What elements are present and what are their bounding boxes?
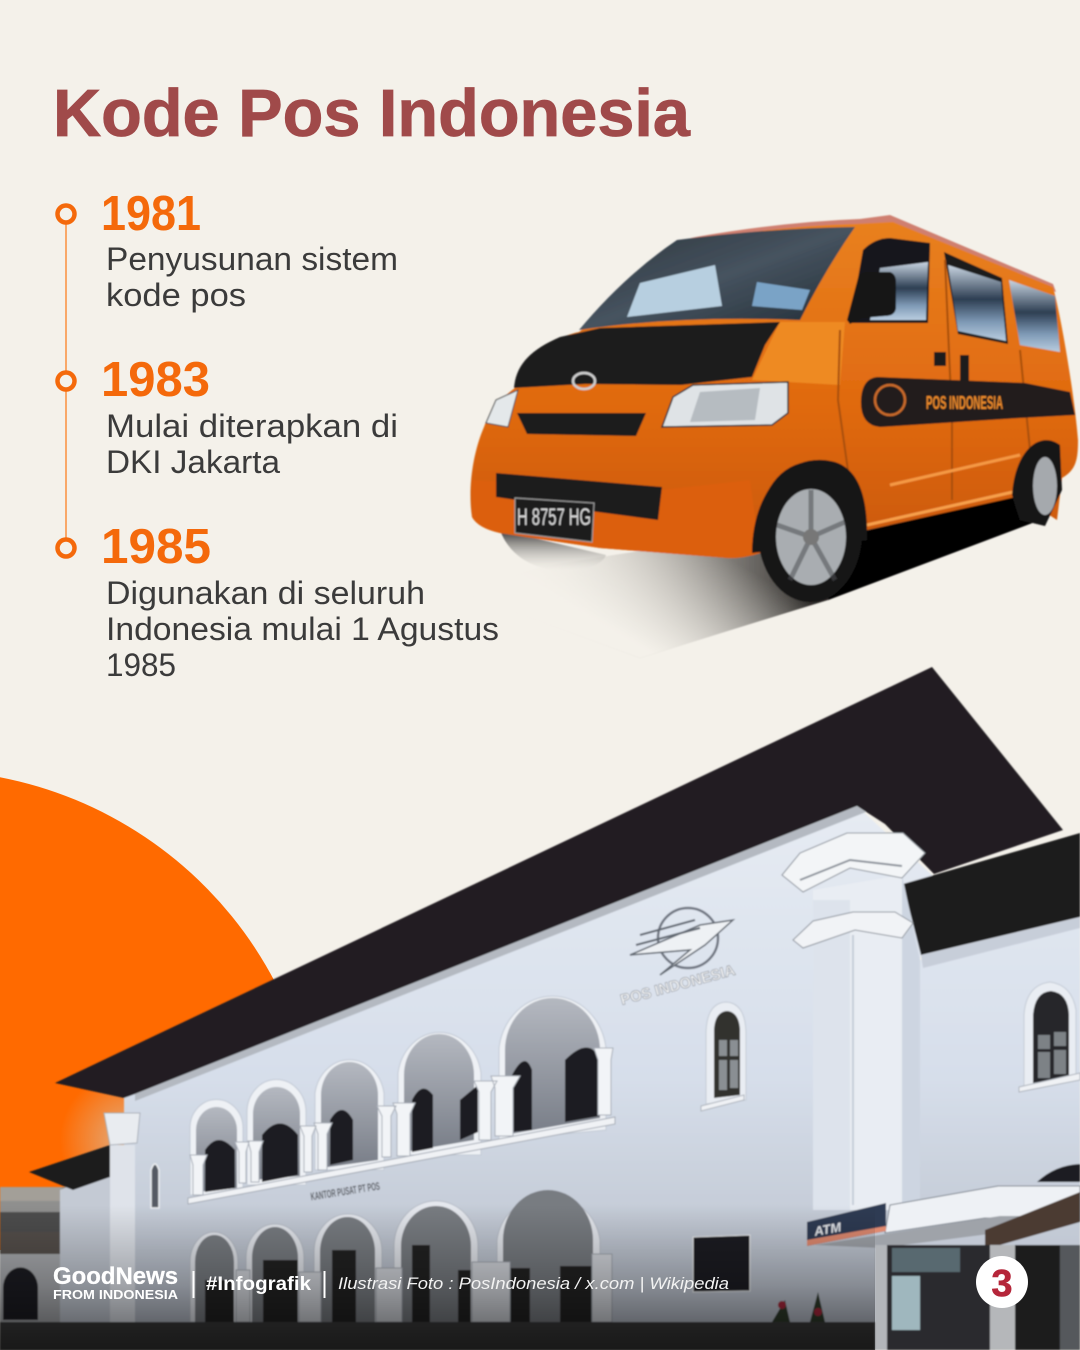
van front tyre under bumper [500,530,606,571]
text 1983: DKI Jakarta [106,444,280,480]
ATM sign [807,1203,886,1246]
ground hedge band [0,1292,875,1350]
photo credit: Ilustrasi Foto : PosIndonesia / x.com | Wikipedia [338,1274,729,1293]
timeline line [65,214,67,548]
text 1985: Indonesia mulai 1 Agustus [106,611,499,647]
ATM sign: ATM [812,1219,843,1239]
van front wheel arch [752,460,867,553]
arch openings [196,998,600,1192]
van door window [850,238,930,323]
year 1983: 1983 [101,353,210,407]
van headlight left [486,390,518,427]
left wing wall [60,1170,135,1350]
van number plate: H 8757 HG [517,504,591,531]
GoodNews logo: FROM INDONESIA [53,1287,179,1302]
orange sun circle [0,777,320,1250]
van ground shadow [460,490,1040,658]
right wing roof [903,833,1080,955]
van front lower shade [472,480,760,558]
van number plate [515,498,594,542]
van rear wheel [1012,440,1062,526]
tower pier [782,833,925,1210]
right lower arch [1037,1164,1080,1182]
van side stripe [861,377,1075,427]
name letters on wall: KANTOR PUSAT PT POS [310,1181,381,1203]
timeline dot 1985 [58,540,74,556]
entry 1983 [101,353,398,480]
van door handles [934,352,969,381]
small square window [693,1235,750,1292]
year 1985: 1985 [101,520,211,574]
title: Kode Pos Indonesia [53,76,691,151]
upper middle window [701,1002,746,1111]
van mirror [847,272,896,324]
van lower intake [496,473,662,520]
van side highlight [752,322,845,385]
left annex building [0,1187,75,1350]
text 1981: Penyusunan sistem [106,241,398,277]
white walls [60,806,1080,1350]
Pos Indonesia wall logo [630,908,733,975]
upper right window [1019,982,1080,1092]
main roof [55,667,1063,1098]
van front wheel [758,462,862,602]
entrance and glass doors [875,1245,1080,1350]
van window 2 [944,252,1008,344]
van roof [690,215,1056,292]
timeline [58,206,74,556]
arch dark interiors [205,1048,600,1192]
arch rims [190,996,606,1195]
entry 1985 [101,520,499,683]
van logo [573,373,595,389]
van windscreen [579,227,855,330]
text 1985: 1985 [106,647,176,683]
GoodNews logo: GoodNews [53,1263,178,1290]
van door seams [838,260,1030,520]
eave band [135,806,866,1101]
text 1983: Mulai diterapkan di [106,408,398,444]
upper arches [188,996,615,1204]
canopy [885,1186,1080,1233]
page number [976,1256,1028,1308]
photo: van [460,215,1078,658]
van window 3 [1009,280,1060,352]
footer [53,1256,1028,1308]
left wing roof [29,1145,110,1190]
GoodNews logo [53,1263,179,1302]
lower arches [190,1190,612,1322]
timeline dot 1981 [58,206,74,222]
photo: building [0,667,1080,1350]
text 1981: kode pos [106,277,246,313]
van stripe logo [875,385,905,415]
van headlight right [662,382,788,427]
van black hood [514,322,780,388]
small lower wall window [151,1164,159,1208]
entry 1981 [101,187,398,313]
footer darkening overlay [0,1205,875,1350]
left corner pillar [104,1113,140,1350]
van sill line [867,492,1013,525]
van body [470,222,1078,558]
year 1981: 1981 [101,187,201,241]
van grille [517,413,646,436]
brown porch roof [985,1192,1080,1245]
van stripe text: POS INDONESIA [926,393,1003,413]
timeline dot 1983 [58,372,74,390]
balustrade columns [190,1048,613,1195]
text 1985: Digunakan di seluruh [106,575,425,611]
page number: 3 [991,1263,1013,1305]
dividers [194,1271,324,1298]
wall sign text: POS INDONESIA [619,962,737,1009]
sill ledge [188,1117,615,1204]
hashtag: #Infografik [206,1274,311,1295]
